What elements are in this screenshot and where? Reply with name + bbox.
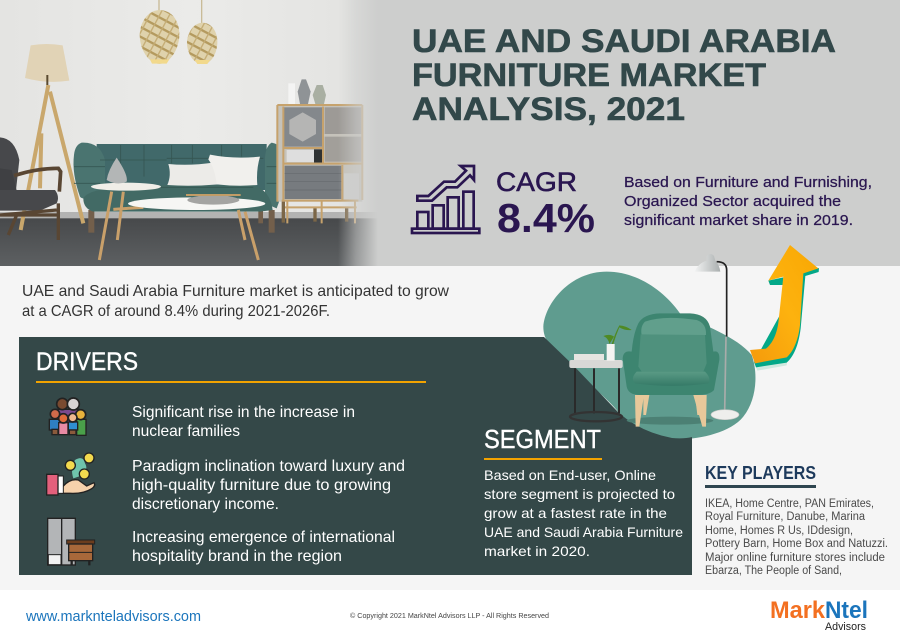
text: high-quality furniture due to growing [132, 477, 391, 494]
intro text: UAE and Saudi Arabia Furniture market is anticipated to grow [22, 283, 449, 300]
key players text: Royal Furniture, Danube, Marina [705, 511, 866, 523]
text [132, 529, 395, 565]
footer copyright: © Copyright 2021 MarkNtel Advisors LLP - All Rights Reserved [350, 612, 549, 620]
photo fade into gray band [338, 0, 378, 266]
footer website: www.marknteladvisors.com [25, 608, 201, 625]
intro text: at a CAGR of around 8.4% during 2021-2026F. [22, 303, 330, 320]
icon: family [49, 398, 86, 435]
sector note [624, 174, 872, 229]
cabinet [277, 79, 362, 223]
key players text: Home, Homes R Us, IDdesign, [705, 525, 853, 537]
vases [288, 83, 295, 104]
driver 3 [48, 518, 395, 565]
logo [770, 597, 868, 633]
logo: Mark [770, 597, 826, 624]
sector note: Organized Sector acquired the [624, 193, 841, 210]
panel: dark background [19, 337, 692, 575]
driver 2 [47, 453, 405, 513]
logo: Advisors [825, 621, 866, 633]
key players text [705, 498, 888, 577]
text: hospitality brand in the region [132, 548, 342, 565]
driver 1 [49, 398, 355, 440]
armchair body [623, 313, 719, 395]
cushions [167, 163, 218, 186]
gray cover past the fade [378, 0, 388, 266]
sector note: Based on Furniture and Furnishing, [624, 174, 872, 191]
tables [91, 158, 265, 260]
shadow [627, 417, 713, 425]
header gray band [0, 0, 900, 266]
key players text: IKEA, Home Centre, PAN Emirates, [705, 498, 874, 510]
text: discretionary income. [132, 496, 279, 513]
text [132, 458, 405, 513]
segment text: market in 2020. [484, 543, 590, 559]
CAGR value [496, 167, 595, 241]
sofa [73, 143, 286, 233]
title [412, 23, 836, 127]
icon: wardrobe and drawers [48, 518, 95, 565]
CAGR value: CAGR [496, 167, 577, 197]
floor lamp [21, 44, 83, 230]
text: Increasing emergence of international [132, 529, 395, 546]
logo: Ntel [825, 597, 868, 624]
key players text: Major online furniture stores include [705, 552, 885, 564]
text: nuclear families [132, 423, 240, 440]
segment text: Based on End-user, Online [484, 467, 656, 483]
standing lamp [695, 254, 739, 420]
side table [569, 325, 632, 421]
sector note: significant market share in 2019. [624, 212, 853, 229]
page background [0, 266, 900, 590]
segment text: UAE and Saudi Arabia Furniture [484, 524, 683, 540]
segment text [484, 467, 683, 559]
segment text: store segment is projected to [484, 486, 675, 502]
key players text: Pottery Barn, Home Box and Natuzzi. [705, 538, 888, 550]
text: Paradigm inclination toward luxury and [132, 458, 405, 475]
key players text: Ebarza, The People of Sand, [705, 565, 842, 577]
drivers heading: DRIVERS [36, 348, 138, 376]
armchair [0, 137, 61, 240]
CAGR value: 8.4% [497, 195, 595, 241]
title: FURNITURE MARKET [412, 57, 766, 93]
icon: hand with coins [47, 453, 95, 495]
living room photo illustration [0, 0, 383, 266]
text [132, 404, 355, 440]
segment block: SEGMENT [484, 424, 601, 454]
segment block [484, 424, 683, 559]
key players block [705, 463, 888, 577]
intro text [22, 283, 449, 320]
segment text: grow at a fastest rate in the [484, 505, 667, 521]
green blob [543, 272, 755, 439]
icon: growth chart [412, 166, 479, 233]
icon: rising arrow [750, 245, 819, 371]
text: Significant rise in the increase in [132, 404, 355, 421]
floor lamp and armchair illustration [569, 254, 739, 427]
legs [635, 395, 707, 427]
title: ANALYSIS, 2021 [412, 91, 685, 127]
title: UAE AND SAUDI ARABIA [412, 23, 836, 59]
pendant lamps [140, 0, 217, 64]
key players block: KEY PLAYERS [705, 463, 816, 483]
